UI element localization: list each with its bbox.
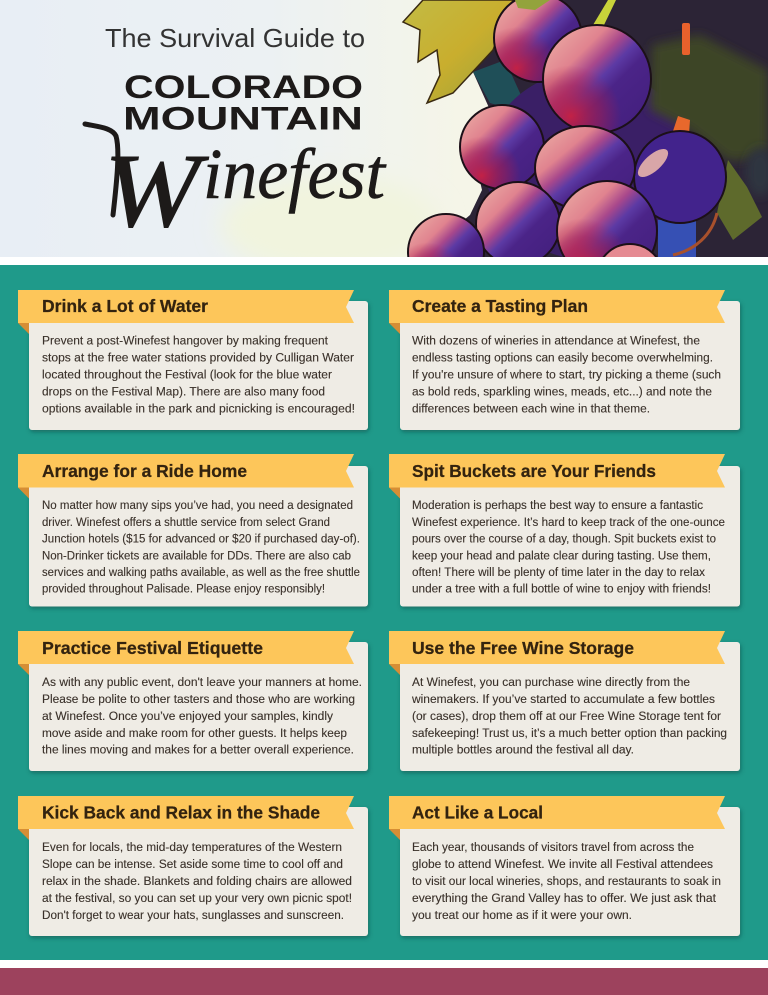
green leaf	[650, 35, 768, 160]
grape top back	[494, 0, 582, 82]
body text: provided throughout Palisade. Please enjoy responsibly!	[42, 582, 325, 596]
body text: move aside and make room for other guests. It helps keep	[42, 726, 347, 740]
maroon footer band	[0, 968, 768, 995]
card body	[29, 301, 368, 430]
body text: Junction hotels ($15 for advanced or $20 if purchased day-of).	[42, 532, 360, 546]
ribbon fold	[389, 323, 400, 334]
ribbon fold	[18, 488, 29, 498]
ribbon fold	[389, 488, 400, 498]
grape lower middle	[557, 181, 657, 281]
body text: as bold reds, sparkling wines, meads, etc...) and note the	[412, 384, 712, 398]
logo flourish	[85, 124, 118, 215]
slate patch by leaf	[746, 148, 768, 196]
ribbon	[389, 290, 725, 323]
grape bottom left	[408, 214, 484, 290]
body text: globe to attend Winefest. We invite all Festival attendees	[412, 857, 713, 871]
body text: Even for locals, the mid-day temperatures of the Western	[42, 840, 342, 854]
body text: endless tasting options can easily become overwhelming.	[412, 350, 713, 364]
body text: often! There will be plenty of time later in the day to relax	[412, 565, 706, 579]
logo line: mountain: MOUNTAIN	[123, 100, 363, 136]
body text	[412, 840, 721, 922]
card body	[400, 301, 740, 430]
body text: differences between each wine in that theme.	[412, 402, 650, 416]
body text	[412, 334, 721, 416]
grape middle	[535, 126, 635, 210]
body text: Each year, thousands of visitors travel from across the	[412, 840, 694, 854]
ribbon	[389, 796, 725, 829]
hillside haze	[220, 175, 440, 275]
tip card: Act Like a Local	[389, 796, 740, 936]
heading: Use the Free Wine Storage	[412, 638, 634, 658]
body text: pours over the course of a day, though. Spit buckets exist to	[412, 532, 716, 546]
ribbon fold	[389, 829, 400, 840]
ribbon fold	[18, 829, 29, 840]
body text: you treat our home as if it were your own.	[412, 908, 632, 922]
card body	[29, 466, 368, 606]
body text: located throughout the Festival (look for the blue water	[42, 368, 332, 382]
ribbon	[18, 290, 354, 323]
body text: At Winefest, you can purchase wine directly from the	[412, 675, 690, 689]
ribbon fold	[389, 664, 400, 675]
heading: Kick Back and Relax in the Shade	[42, 802, 320, 822]
body text: relax in the shade. Blankets and folding chairs are allowed	[42, 874, 352, 888]
teal shadow behind leaf	[473, 60, 530, 115]
orange spot upper	[682, 23, 690, 55]
heading: Create a Tasting Plan	[412, 296, 588, 316]
grape highlight	[634, 144, 672, 182]
card body	[400, 807, 740, 936]
body text	[42, 334, 355, 416]
tip card: Arrange for a Ride Home	[18, 454, 368, 606]
logo: Colorado Mountain Winefest	[85, 69, 387, 249]
heading: Practice Festival Etiquette	[42, 638, 263, 658]
body text: winemakers. If you’ve started to accumulate a few bottles	[411, 692, 715, 706]
body text: to visit our local wineries, shops, and restaurants to soak in	[412, 874, 721, 888]
blue grape sliver	[658, 220, 696, 257]
logo script initial: W: W	[104, 132, 209, 249]
card body	[400, 642, 740, 771]
body text: If you're unsure of where to start, try picking a theme (such	[412, 368, 721, 382]
stem	[593, 0, 616, 25]
body text	[412, 498, 725, 596]
dark foliage backdrop	[420, 0, 768, 257]
orange tendril	[673, 213, 717, 255]
title: the survival guide to: The Survival Guide to	[105, 23, 365, 53]
body text: Non-Drinker tickets are available for DDs. There are also cab	[42, 548, 351, 562]
body text: keep your head and palate clear during tasting. Use them,	[412, 548, 711, 562]
ribbon	[389, 454, 725, 488]
grape bottom	[597, 244, 663, 310]
orange spot lower	[670, 116, 690, 148]
body text: safekeeping! Trust us, it’s a much better option than packing	[412, 726, 727, 740]
body text: everything the Grand Valley has to offer. We just ask that	[412, 891, 717, 905]
sky background	[0, 0, 768, 257]
heading: Arrange for a Ride Home	[42, 461, 247, 481]
ribbon	[18, 454, 354, 488]
body text: Winefest experience. It’s hard to keep track of the one-ounce	[412, 515, 725, 529]
teal main panel	[0, 265, 768, 960]
body text: With dozens of wineries in attendance at Winefest, the	[412, 334, 700, 348]
logo line: colorado: COLORADO	[124, 69, 363, 105]
ribbon	[18, 796, 354, 829]
body text: at Winefest. Once you’ve enjoyed your samples, kindly	[42, 709, 334, 723]
body text: at the festival, so you can set up your very own picnic spot!	[42, 891, 352, 905]
body text: Prevent a post-Winefest hangover by making frequent	[42, 334, 329, 348]
grape left	[460, 105, 544, 189]
ribbon	[389, 631, 725, 664]
heading: Spit Buckets are Your Friends	[412, 461, 656, 481]
white band above teal	[0, 257, 768, 265]
yellow leaf	[403, 0, 513, 103]
body text: drops on the Festival Map). There are also many food	[42, 384, 325, 398]
grape lower left	[476, 182, 560, 266]
logo script: inefest: inefest	[203, 134, 387, 214]
body text: services and walking paths available, as well as the free shuttle	[42, 565, 360, 579]
ribbon	[18, 631, 354, 664]
body text: Don't forget to wear your hats, sunglasses and sunscreen.	[42, 908, 344, 922]
tip card: Spit Buckets are Your Friends	[389, 454, 740, 606]
body text: options available in the park and picnicking is encouraged!	[42, 402, 355, 416]
grape main	[543, 25, 651, 133]
purple shade between grapes	[485, 70, 695, 260]
leaf tip over grape	[515, 0, 550, 10]
body text: driver. Winefest offers a shuttle service from select Grand	[42, 515, 330, 529]
lower leaf lobe	[717, 160, 762, 240]
body text: Please be polite to other tasters and those who are working	[42, 692, 355, 706]
card body	[29, 807, 368, 936]
tip card: Kick Back and Relax in the Shade	[18, 796, 368, 936]
body text	[42, 840, 352, 922]
body text: the lines moving and makes for a better overall experience.	[42, 742, 354, 756]
tip card: Create a Tasting Plan	[389, 290, 740, 430]
grape right dark	[634, 131, 726, 223]
card body	[29, 642, 368, 771]
body text: under a tree with a full bottle of wine to enjoy with friends!	[412, 582, 711, 596]
tip card: Use the Free Wine Storage	[389, 631, 740, 771]
heading: Act Like a Local	[412, 802, 543, 822]
card body	[400, 466, 740, 606]
body text	[411, 675, 727, 756]
body text: As with any public event, don't leave your manners at home.	[42, 675, 362, 689]
body text: No matter how many sips you’ve had, you need a designated	[42, 498, 353, 512]
body text: Slope can be intense. Set aside some time to cool off and	[42, 857, 343, 871]
body text: multiple bottles around the festival all day.	[412, 742, 634, 756]
body text: Moderation is perhaps the best way to ensure a fantastic	[412, 498, 703, 512]
tip card: Practice Festival Etiquette	[18, 631, 368, 771]
tip card: Drink a Lot of Water	[18, 290, 368, 430]
body text: stops at the free water stations provided by Culligan Water	[42, 350, 354, 364]
body text	[42, 675, 362, 756]
ribbon fold	[18, 323, 29, 334]
ribbon fold	[18, 664, 29, 675]
header banner	[0, 0, 768, 310]
body text	[42, 498, 360, 596]
body text: (or cases), drop them off at our Free Wine Storage tent for	[412, 709, 721, 723]
heading: Drink a Lot of Water	[42, 296, 208, 316]
